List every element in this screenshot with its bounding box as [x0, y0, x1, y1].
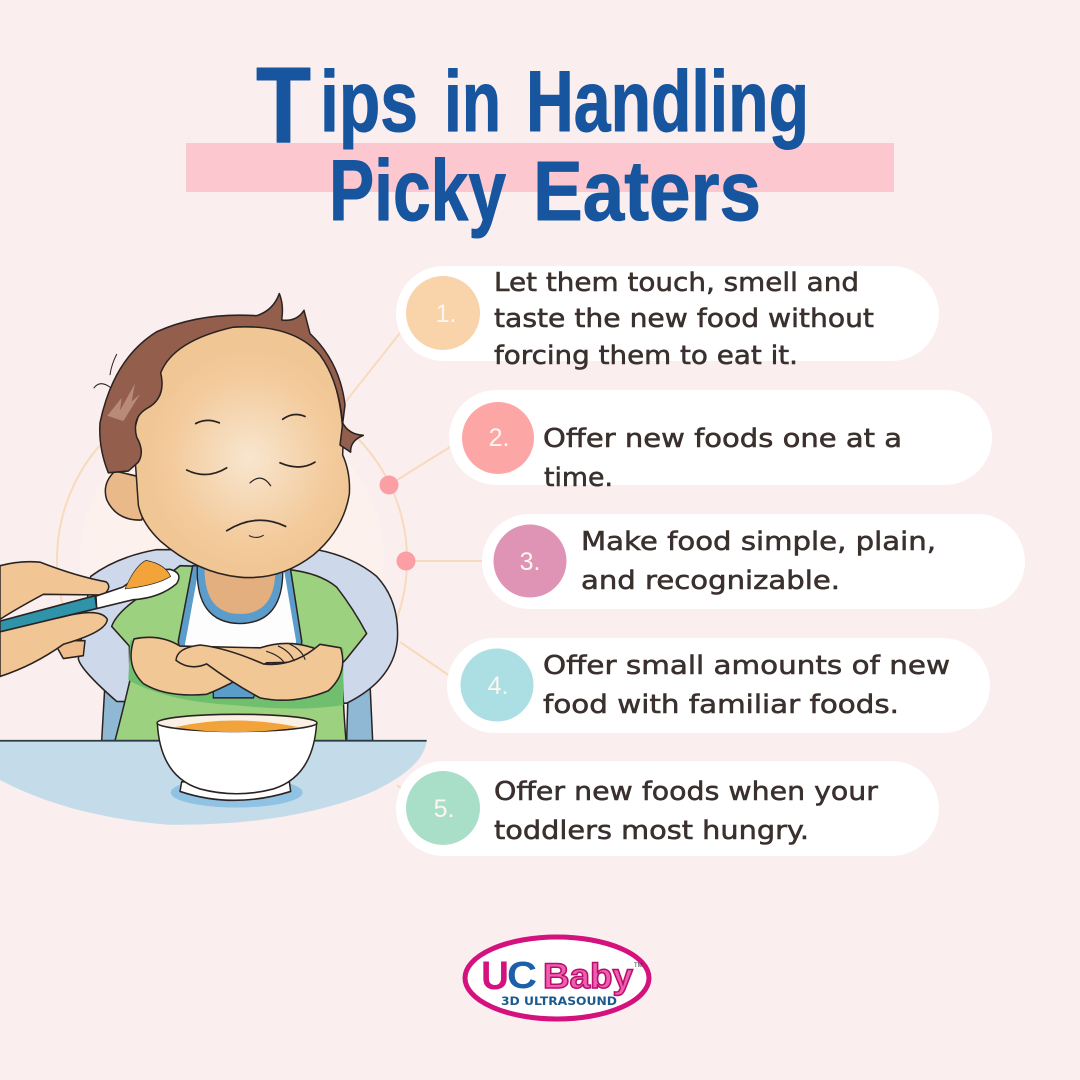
tip 5: toddlers most hungry. — [494, 816, 809, 846]
closed eyes, nose and frown — [187, 414, 315, 537]
tip 5 — [396, 761, 939, 856]
table — [0, 741, 427, 825]
tip 4 — [447, 638, 990, 733]
title: T — [256, 44, 311, 165]
connector ring and lines — [57, 333, 482, 796]
title: Picky — [329, 143, 506, 239]
tip 2: Offer new foods one at a — [543, 424, 902, 454]
tip 3: 3. — [520, 548, 540, 576]
tip 3: Make food simple, plain, — [581, 527, 936, 557]
tip 1 — [396, 266, 939, 371]
logo: UC Baby 3D Ultrasound: U — [481, 954, 509, 998]
hair — [94, 294, 363, 473]
illustration: picky baby in high chair — [0, 294, 427, 825]
tip 3: and recognizable. — [581, 566, 840, 596]
tip 4: 4. — [488, 672, 508, 700]
tip 2: time. — [544, 463, 613, 493]
tip 4: food with familiar foods. — [543, 690, 899, 720]
logo: UC Baby 3D Ultrasound: 3D ULTRASOUND — [501, 994, 617, 1008]
title band — [186, 143, 894, 192]
tip 1: Let them touch, smell and — [494, 268, 859, 298]
crossed arms — [131, 637, 343, 700]
logo: UC Baby 3D Ultrasound: Baby — [543, 957, 634, 996]
title: Handling — [526, 54, 809, 150]
title: in — [444, 54, 501, 150]
tip 5: 5. — [434, 795, 454, 823]
tip 1: taste the new food without — [494, 304, 874, 334]
chair — [78, 550, 398, 741]
logo: UC Baby 3D Ultrasound: C — [507, 955, 537, 997]
title: Eaters — [533, 144, 761, 238]
tip 1: 1. — [436, 300, 456, 328]
logo: UC Baby 3D Ultrasound — [465, 937, 649, 1019]
soup bowl — [157, 714, 317, 807]
tip 4: Offer small amounts of new — [543, 651, 950, 681]
caregiver hand with spoon — [0, 560, 179, 676]
connector dot 2 — [380, 476, 398, 494]
tip 2 — [449, 390, 992, 493]
shirt — [112, 566, 367, 741]
tip 2: 2. — [489, 424, 509, 452]
connector dot 3 — [396, 552, 416, 570]
ear — [105, 471, 153, 520]
head — [133, 317, 350, 578]
tip 3 — [482, 514, 1025, 609]
title — [256, 44, 809, 239]
logo: UC Baby 3D Ultrasound: TM — [634, 963, 643, 969]
tip 5: Offer new foods when your — [494, 777, 879, 807]
tip 1: forcing them to eat it. — [494, 341, 798, 371]
bib — [178, 566, 302, 698]
title: ips — [320, 54, 418, 150]
